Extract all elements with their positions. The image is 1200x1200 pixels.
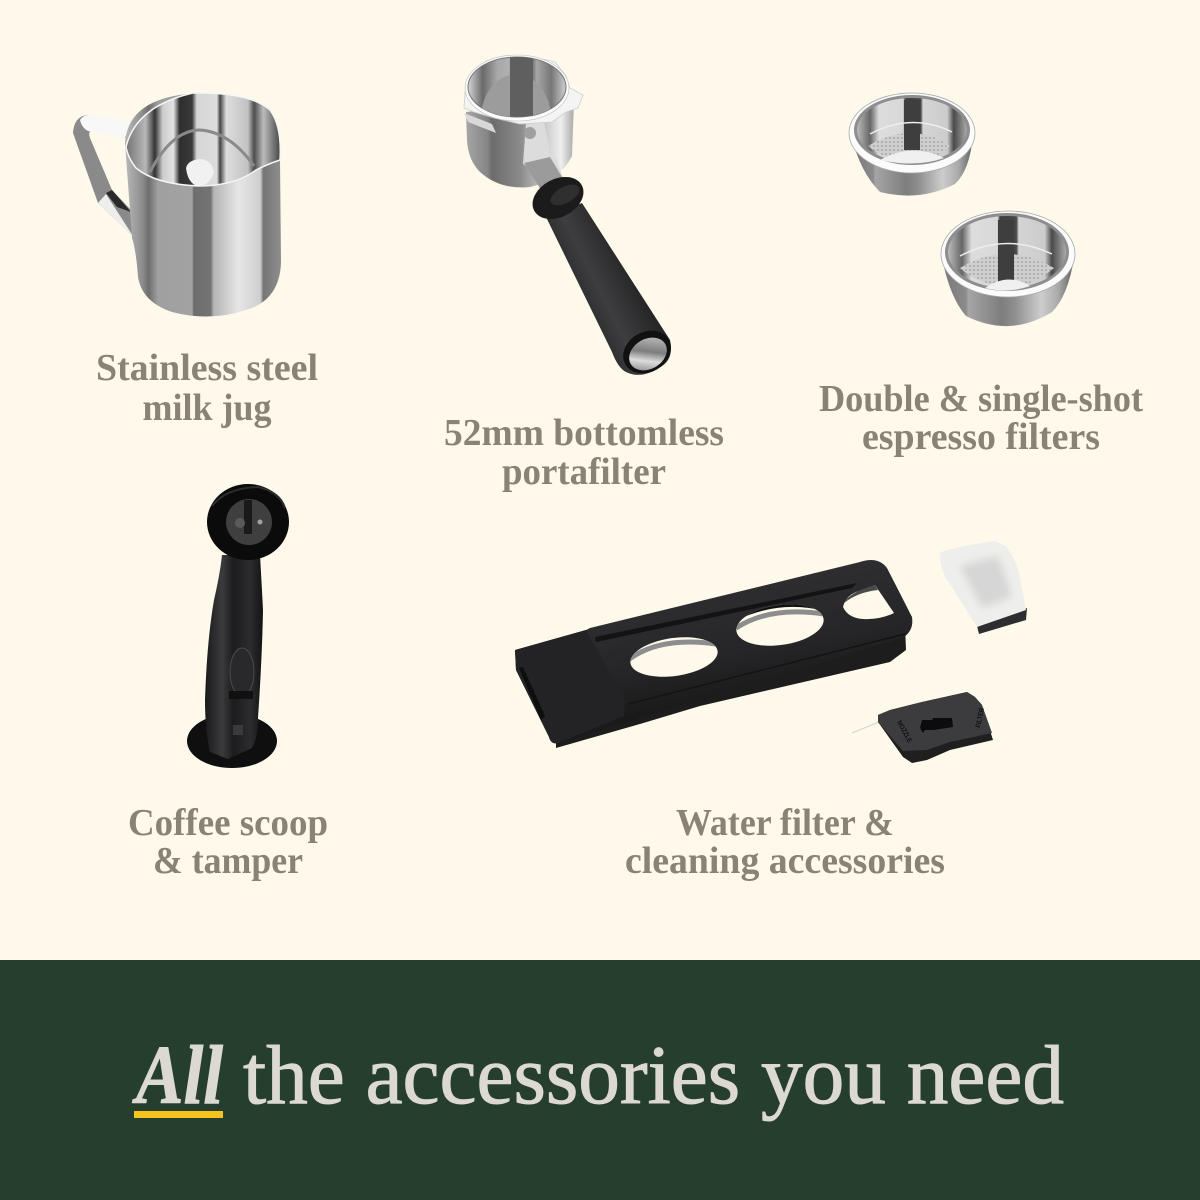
scoop bowl [207, 484, 289, 560]
icon: single-shot filter [849, 93, 975, 196]
text: water filter label [625, 802, 945, 882]
holder left sleeve [515, 630, 625, 743]
heading: the accessories you need: the accessories you need [243, 1029, 1064, 1122]
jug body [125, 93, 281, 317]
text: portafilter label [444, 412, 724, 493]
jug inner post [186, 159, 214, 186]
jug handle [73, 115, 133, 236]
text: water filter label: cleaning accessories [625, 840, 945, 882]
text: coffee scoop label [128, 802, 328, 882]
text: stainless steel milk jug label: Stainless steel [96, 347, 318, 389]
portafilter neck [523, 122, 563, 192]
text: coffee scoop label: & tamper [153, 840, 303, 882]
jug inner bottom arc [150, 130, 254, 172]
hole 1 [630, 637, 718, 677]
footer band [0, 960, 1200, 1200]
heading: All: All [132, 1029, 224, 1122]
icon: water filter pad [940, 541, 1027, 634]
tool text: right: FILTER [975, 707, 986, 728]
text: espresso filters label [819, 378, 1143, 458]
portafilter rim [464, 55, 583, 133]
tool text: left: NOZZLE [895, 720, 913, 744]
underline [134, 1111, 223, 1118]
icon: coffee scoop and tamper [187, 484, 289, 768]
text: espresso filters label: espresso filters [862, 416, 1100, 458]
text: espresso filters label: Double & single-shot [819, 378, 1143, 420]
stem window [230, 648, 254, 696]
portafilter handle [546, 203, 671, 375]
text: water filter label: Water filter & [676, 802, 894, 844]
icon: bottomless portafilter [464, 55, 679, 382]
hole 3 [843, 585, 894, 619]
text: coffee scoop label: Coffee scoop [128, 802, 328, 844]
portafilter basket [466, 100, 574, 187]
text: portafilter label: portafilter [502, 451, 666, 493]
icon: stainless steel milk jug [73, 93, 281, 317]
tamper base [187, 714, 277, 768]
icon: double and single-shot espresso filters [849, 93, 1075, 326]
holder body [515, 560, 912, 743]
icon: double-shot filter [941, 211, 1075, 326]
hole 2 [736, 604, 824, 646]
icon: water filter holder [515, 560, 912, 748]
scoop stem [205, 555, 263, 759]
icon: cleaning tool [852, 692, 993, 763]
text: stainless steel milk jug label [96, 347, 318, 429]
portafilter collar [525, 169, 591, 227]
text: stainless steel milk jug label: milk jug [142, 387, 272, 429]
jug interior [126, 93, 280, 186]
text: portafilter label: 52mm bottomless [444, 412, 724, 454]
portafilter end cap [615, 322, 679, 382]
holder shadow [556, 625, 906, 748]
